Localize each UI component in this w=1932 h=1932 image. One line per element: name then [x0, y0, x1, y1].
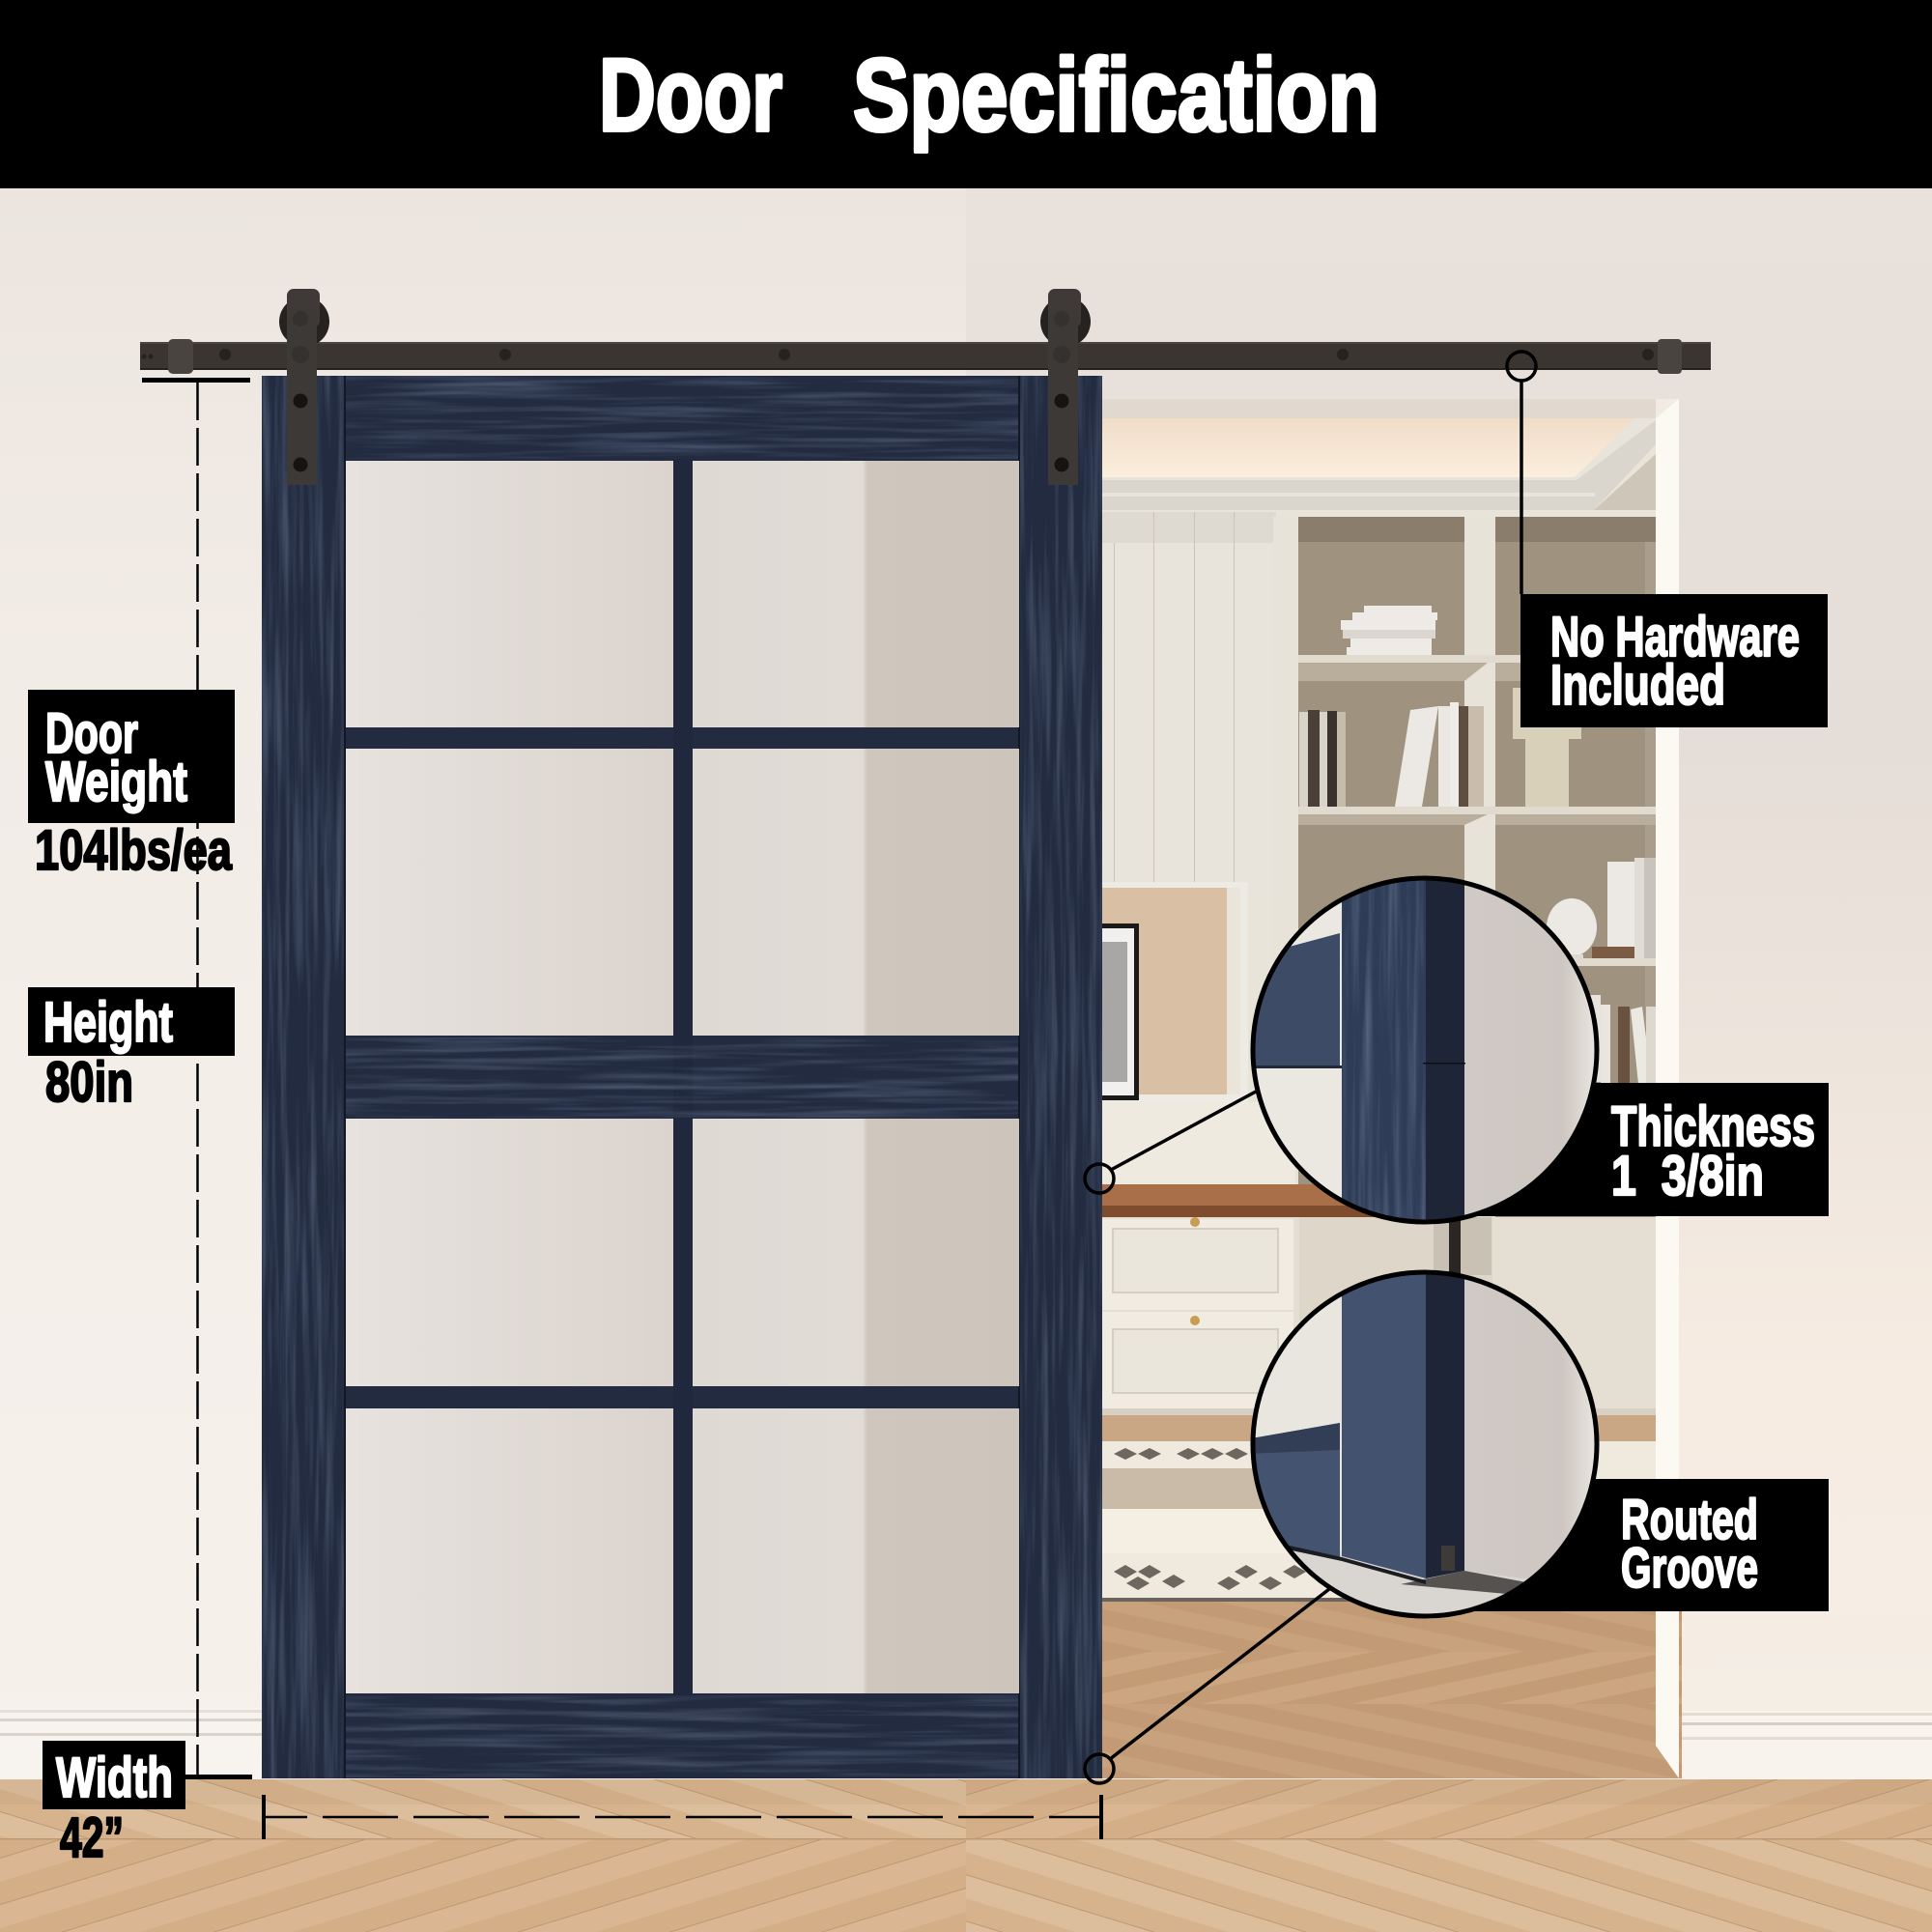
width dimension line: [262, 1795, 1103, 1839]
panelled wall: [1102, 510, 1276, 929]
label: routed groove: [1449, 1479, 1829, 1611]
detail circle: routed groove: [1246, 1265, 1605, 1623]
label: door weight: Door: [45, 702, 138, 765]
right wall: [966, 188, 1932, 1782]
label: thickness: [1449, 1083, 1829, 1216]
title: [599, 37, 1379, 153]
lower cabinet: [1102, 1217, 1656, 1415]
leader: thickness: [1085, 1092, 1256, 1193]
label: no hardware included: No Hardware: [1550, 606, 1800, 668]
label: routed groove: Routed: [1621, 1489, 1758, 1551]
door rails: [344, 376, 1020, 1778]
height dimension line: [142, 378, 252, 1779]
title: Specification: [853, 37, 1379, 153]
barn door track: [140, 339, 1711, 374]
upright books: [1299, 702, 1484, 807]
label: thickness: 1 3/8in: [1611, 1145, 1764, 1208]
floor: [0, 1779, 1932, 1932]
opening top jamb: [1102, 399, 1679, 418]
interior back wall: [1102, 399, 1656, 1606]
detail circle: thickness: [1246, 869, 1605, 1227]
title: Door: [599, 37, 782, 153]
label: door weight: [28, 690, 235, 823]
white vase: [1547, 898, 1597, 959]
ceiling glow: [1102, 418, 1634, 477]
crown moulding: [1102, 420, 1656, 510]
label: routed groove: Groove: [1621, 1537, 1758, 1600]
left baseboard: [0, 1708, 263, 1779]
value: 80in: 80in: [45, 1051, 133, 1114]
label: no hardware included: [1520, 594, 1828, 727]
right baseboard: [1679, 1711, 1932, 1779]
right hanger: [1040, 289, 1091, 485]
doorway interior scene: [1102, 399, 1682, 1778]
barn door: [262, 376, 1102, 1778]
value: 104lbs/ea: 104lbs/ea: [35, 819, 233, 882]
door frame: [262, 376, 1102, 1778]
stacked books: [1341, 606, 1437, 655]
label: thickness: Thickness: [1611, 1095, 1815, 1158]
left hanger: [279, 289, 329, 485]
rug: [1102, 1441, 1656, 1602]
bookcase: [1273, 517, 1656, 1270]
label: no hardware included: Included: [1550, 654, 1725, 717]
label: width: Width: [56, 1747, 173, 1809]
leader: no hardware: [1507, 352, 1536, 594]
wooden desk: [1102, 1184, 1402, 1217]
leader: routed groove: [1085, 1589, 1329, 1783]
door jamb: [1656, 399, 1679, 1778]
value: 42 inches: 42”: [60, 1806, 124, 1869]
soffit: [1102, 399, 1656, 418]
books on right shelf: [1589, 858, 1656, 1084]
stone sculpture: [1513, 688, 1581, 807]
framed photo: [1102, 923, 1139, 1100]
interior floor: [1102, 1415, 1682, 1778]
label: door weight: Weight: [45, 751, 187, 813]
art print: [1102, 882, 1248, 1102]
header bar: [0, 0, 1932, 188]
left wall: [0, 188, 966, 1782]
glass panes: [346, 461, 1019, 1693]
label: height: Height: [43, 991, 173, 1054]
cabinet top: [1102, 1102, 1295, 1184]
